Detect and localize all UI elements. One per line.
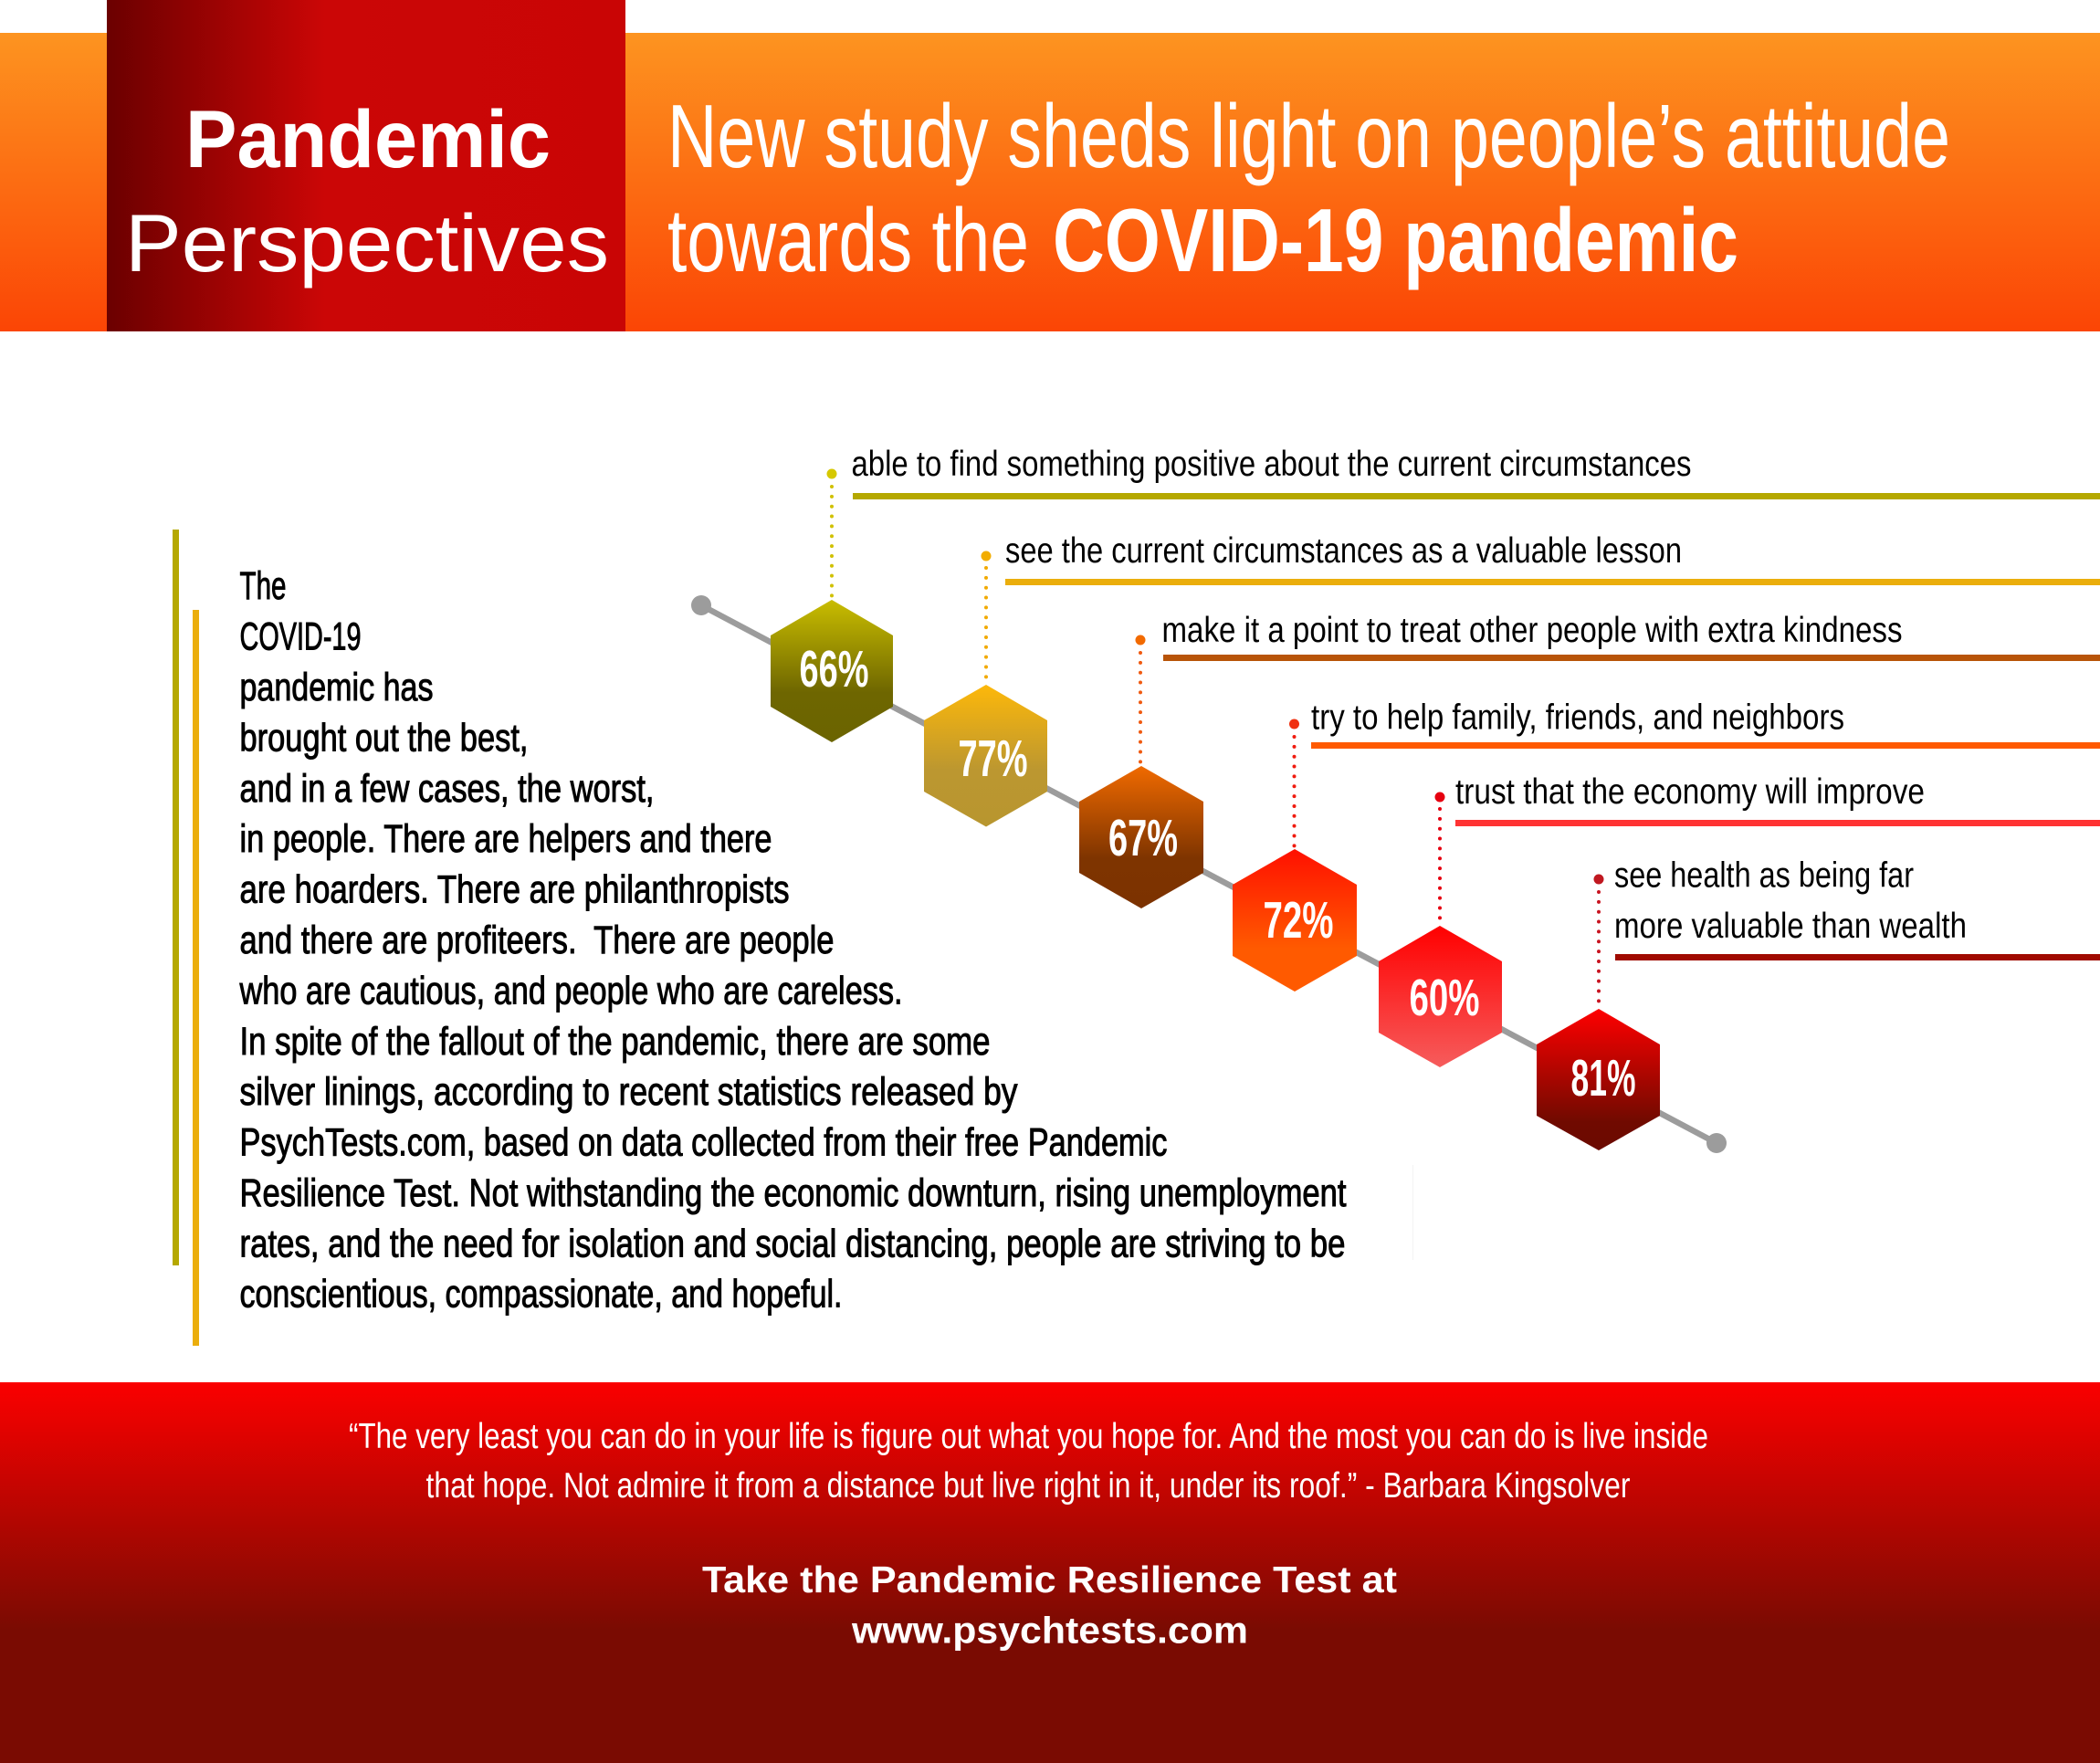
finding 1: label and rule: [851, 445, 2100, 499]
finding 1: label and rule: able to find something positive about the current circumstances: [851, 445, 1691, 484]
hexagon 66%: [771, 600, 893, 742]
intro text block: in people. There are helpers and there: [239, 817, 772, 861]
intro text block: who are cautious, and people who are careless.: [239, 969, 902, 1013]
intro text block: In spite of the fallout of the pandemic, there are some: [239, 1020, 990, 1064]
header band: [0, 33, 2100, 331]
finding 4: label and rule: try to help family, friends, and neighbors: [1311, 698, 1844, 738]
leader 3: dotted line and dot: [1136, 635, 1145, 764]
call to action: www.psychtests.com: [851, 1609, 1248, 1651]
hexagon 67%: 67%: [1108, 809, 1178, 867]
finding 2: label and rule: [1005, 531, 2100, 585]
quote: “The very least you can do in your life is figure out what you hope for. And the most you can do is live inside: [349, 1417, 1708, 1456]
finding 3: label and rule: make it a point to treat other people with extra kindness: [1161, 611, 1903, 650]
quote: [349, 1417, 1708, 1506]
leader 2: dotted line and dot: [981, 551, 992, 680]
finding 6: label and rule: [1614, 856, 2100, 960]
hexagon 77%: [924, 685, 1047, 827]
intro text block: rates, and the need for isolation and social distancing, people are striving to be: [239, 1222, 1346, 1265]
headline line two regular: towards the: [667, 190, 1029, 290]
finding 5: label and rule: trust that the economy will improve: [1455, 772, 1925, 812]
intro text block: COVID-19: [239, 614, 362, 658]
finding 6: label and rule: more valuable than wealth: [1614, 907, 1967, 946]
intro text block: brought out the best,: [239, 716, 528, 760]
hexagon 72%: [1233, 849, 1357, 992]
hexagon 60%: [1379, 926, 1502, 1067]
headline line two bold: COVID-19 pandemic: [1053, 190, 1738, 290]
call to action: Take the Pandemic Resilience Test at: [702, 1558, 1397, 1600]
intro text block: are hoarders. There are philanthropists: [239, 868, 789, 912]
leader 6: dotted line and dot: [1594, 875, 1603, 1003]
hexagon 72%: 72%: [1264, 891, 1333, 950]
finding 6: label and rule: see health as being far: [1614, 856, 1914, 895]
hexagon 81%: [1537, 1009, 1660, 1150]
quote: that hope. Not admire it from a distance but live right in it, under its roof.” - Barbara Kingsolver: [425, 1466, 1631, 1506]
hexagon 81%: 81%: [1570, 1049, 1636, 1107]
intro text block: silver linings, according to recent statistics released by: [239, 1070, 1018, 1114]
timeline connector with end dots: [691, 595, 1727, 1153]
hexagon 66%: 66%: [800, 640, 869, 698]
intro text block: and in a few cases, the worst,: [239, 767, 654, 811]
intro text block: Resilience Test. Not withstanding the economic downturn, rising unemployment: [239, 1171, 1347, 1215]
intro text block: The: [239, 564, 287, 608]
leader 4: dotted line and dot: [1289, 719, 1299, 848]
finding 5: label and rule: [1455, 772, 2100, 826]
leader 1: dotted line and dot: [827, 469, 836, 598]
intro text block: PsychTests.com, based on data collected from their free Pandemic: [239, 1121, 1167, 1165]
intro text block: and there are profiteers. There are people: [239, 918, 835, 962]
finding 2: label and rule: see the current circumstances as a valuable lesson: [1005, 531, 1682, 571]
left accent bar: yellow: [193, 610, 199, 1346]
call to action: [702, 1558, 1397, 1651]
title word: Pandemic: Pandemic: [185, 93, 551, 184]
left accent bar: olive: [173, 530, 179, 1265]
intro text block: [239, 564, 1347, 1317]
intro text block: pandemic has: [239, 666, 433, 709]
hexagon 60%: 60%: [1410, 969, 1479, 1027]
finding 4: label and rule: [1311, 698, 2100, 749]
hexagon 67%: [1079, 766, 1203, 908]
title word: Perspectives: Perspectives: [125, 197, 609, 289]
footer band: [0, 1382, 2100, 1763]
leader 5: dotted line and dot: [1435, 792, 1444, 920]
hexagon 77%: 77%: [959, 729, 1028, 788]
intro text block: conscientious, compassionate, and hopeful.: [239, 1273, 842, 1317]
title box: Pandemic Perspectives: [107, 0, 625, 331]
